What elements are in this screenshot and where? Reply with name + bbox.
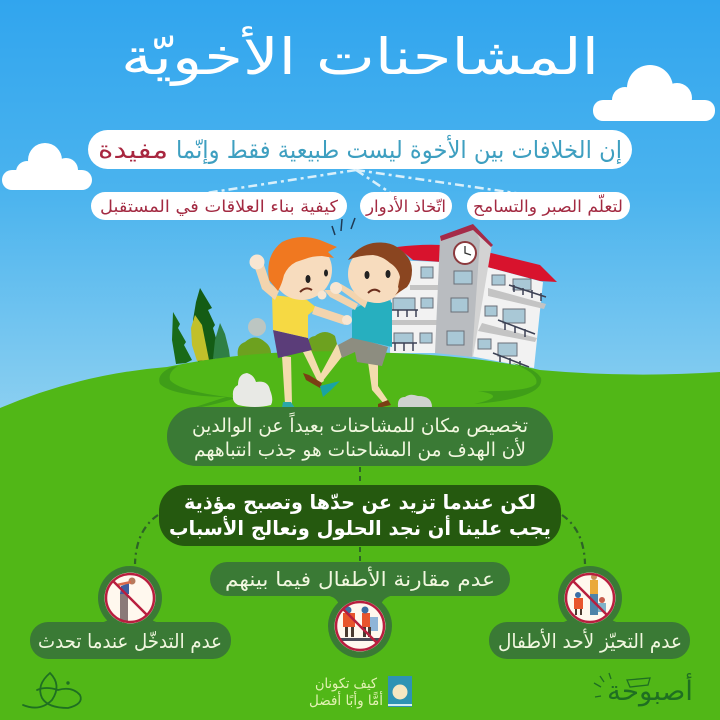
cloud: top right [593,65,715,121]
rock left [233,373,272,407]
school building [388,224,557,368]
rock right [398,395,432,407]
connector: warning to right tip [562,515,585,564]
headline pill: مفيدة [98,136,168,164]
cloud: left [2,143,92,190]
brand: book logo and caption: كيف تكونان [315,676,377,692]
tip right: no favoritism [489,566,690,659]
tip centre: no comparing: عدم مقارنة الأطفال فيما بينهم [225,567,495,591]
title: المشاحنات الأخويّة [121,26,599,86]
headline pill [88,130,632,169]
pill: dedicated place [167,407,553,466]
benefit pill: roles: اتّخاذ الأدوار [365,196,446,217]
connector: warning to left tip [135,515,158,564]
connector: warning to centre tip [359,547,361,562]
tip centre: no comparing [210,562,510,658]
bushes and distant smoke [238,318,339,357]
benefit pill: patience: لتعلّم الصبر والتسامح [473,193,623,217]
ground [0,351,720,720]
benefit pill: roles [360,192,452,220]
anger marks [332,218,355,235]
hill swirl right [474,363,541,404]
pill: warning [159,485,561,546]
boy right [318,242,412,408]
sky background [0,0,720,420]
tip left: no intervening: عدم التدخّل عندما تحدث [38,629,222,653]
hill swirl left [159,366,236,410]
pill: dedicated place: لأن الهدف من المشاحنات هو جذب انتباههم [194,438,526,461]
tip left: no intervening [30,566,231,659]
benefit pill: patience [467,192,630,220]
tip right: no favoritism: عدم التحيّز لأحد الأطفال [498,629,682,653]
brand: book logo and caption: أمًّا وأبًا أفضل [309,691,383,709]
pill: warning: يجب علينا أن نجد الحلول ونعالج الأسباب [169,514,551,540]
pill: warning: لكن عندما تزيد عن حدّها وتصبح مؤذية [184,490,536,514]
logo: right brand: أصبوحة [607,672,693,707]
pill: dedicated place: تخصيص مكان للمشاحنات بعيداً عن الوالدين [192,412,528,437]
logo: left signature [23,673,81,708]
benefit pill: relationships: كيفية بناء العلاقات في المستقبل [100,197,338,217]
trees [172,288,230,364]
headline pill: إن الخلافات بين الأخوة ليست طبيعية فقط وإنّما [176,135,622,165]
boy left [250,235,352,408]
connector dashes from headline to benefits [200,170,522,194]
benefit pill: relationships [91,192,347,220]
brand: book logo and caption [309,676,412,709]
connector: dedicated place to warning [359,467,361,484]
